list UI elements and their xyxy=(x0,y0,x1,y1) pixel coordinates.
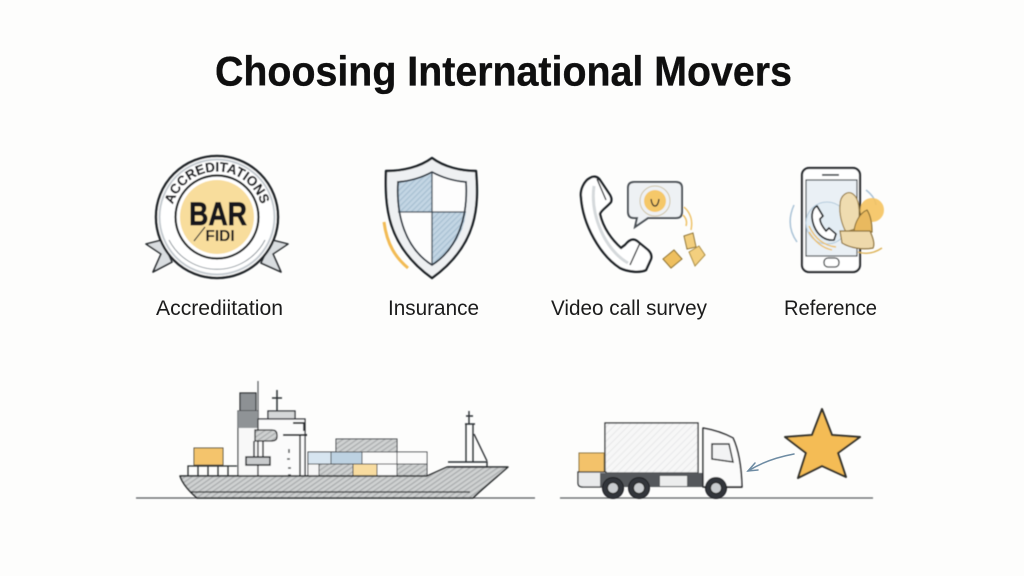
icon: star xyxy=(785,409,860,478)
label: Insurance: Insurance xyxy=(388,297,479,320)
icon: accreditation badge xyxy=(144,154,290,280)
icon: accreditation badge: ACCREDITATIONS xyxy=(164,161,270,205)
title: Choosing International Movers xyxy=(215,48,792,94)
arrow: star to truck xyxy=(748,454,794,471)
containers xyxy=(308,439,427,476)
icon: accreditation badge: FIDI xyxy=(205,228,235,245)
icon: accreditation badge: BAR xyxy=(189,196,247,232)
wheels xyxy=(602,478,726,498)
illustration: container ship xyxy=(136,381,535,498)
label: Accreditation: Accrediitation xyxy=(156,297,283,320)
illustration: delivery truck xyxy=(560,423,873,498)
label: Video call survey: Video call survey xyxy=(551,297,707,320)
icon: shield xyxy=(384,158,477,278)
icon: smartphone with reference xyxy=(790,168,884,272)
icon: phone handset and chat bubble xyxy=(581,177,705,272)
label: Reference: Reference xyxy=(784,297,877,320)
